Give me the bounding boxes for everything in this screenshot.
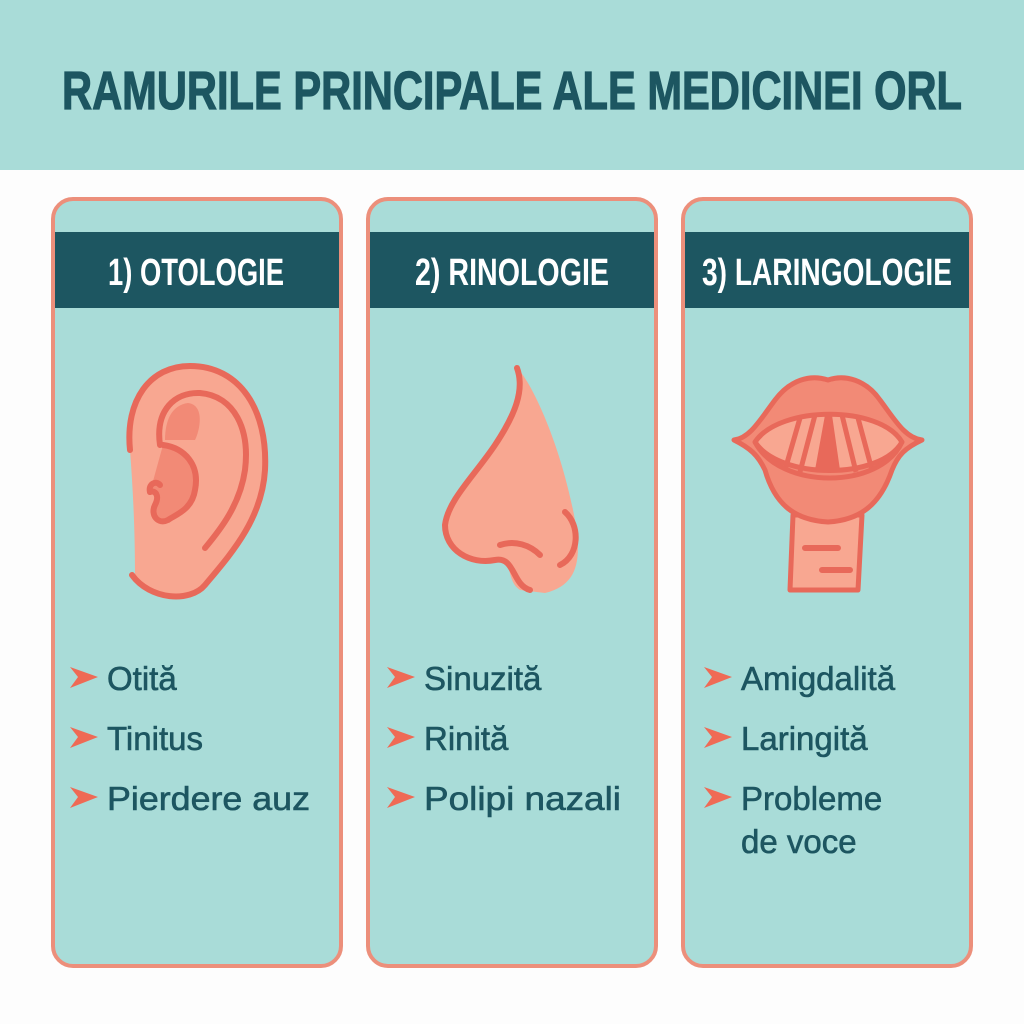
icon: throat: [734, 378, 922, 590]
bullet list: Pierdere auz: [107, 780, 310, 817]
icon: nose: [445, 368, 578, 593]
panel heading: [370, 232, 654, 308]
panel: laringologie: [683, 199, 971, 966]
panel heading: 1) OTOLOGIE: [108, 252, 284, 294]
header band: [0, 0, 1024, 170]
bullet list: Rinită: [424, 720, 509, 757]
bullet list: Probleme: [741, 780, 882, 817]
bullet list: [387, 660, 621, 817]
bullet list: Polipi nazali: [424, 780, 621, 817]
bullet list: Amigdalită: [741, 660, 896, 697]
bullet list: Otită: [107, 660, 177, 697]
panel heading: [55, 232, 339, 308]
panel heading: 2) RINOLOGIE: [415, 252, 609, 294]
bullet list: [704, 660, 896, 860]
panel heading: [685, 232, 969, 308]
panel: rinologie: [368, 199, 656, 966]
bullet list: Sinuzită: [424, 660, 542, 697]
icon: ear: [129, 366, 265, 597]
bullet list: de voce: [741, 823, 857, 860]
bullet list: Laringită: [741, 720, 868, 757]
panel: otologie: [53, 199, 341, 966]
bullet list: Tinitus: [107, 720, 203, 757]
bullet list: [70, 660, 310, 817]
